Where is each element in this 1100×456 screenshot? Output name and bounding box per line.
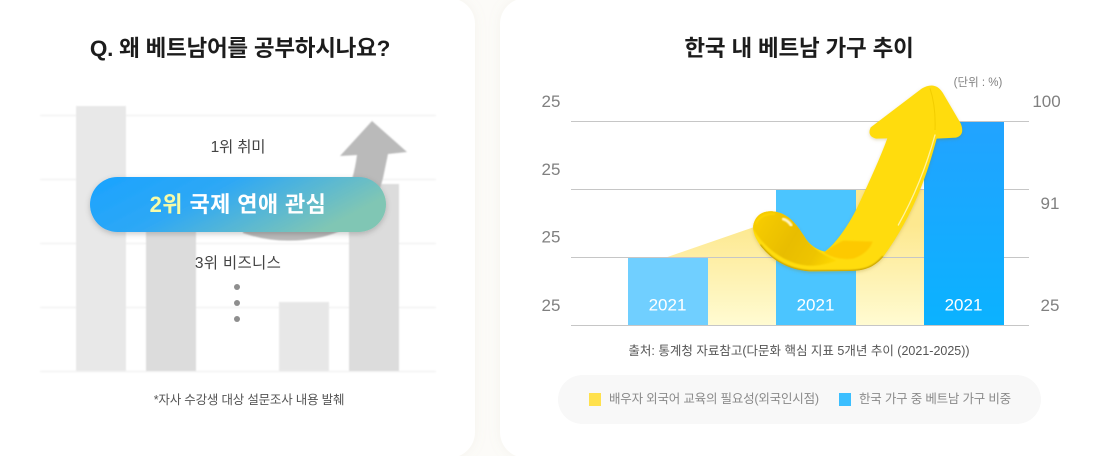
left axis labels: 25 bbox=[542, 228, 560, 246]
inner fold shade bbox=[824, 241, 873, 259]
icon: vertical ellipsis bbox=[234, 284, 240, 322]
left axis labels: 25 bbox=[542, 92, 560, 111]
footnote: *자사 수강생 대상 설문조사 내용 발췌 bbox=[154, 393, 344, 407]
right axis labels bbox=[1032, 92, 1061, 315]
right axis labels: 91 bbox=[1041, 194, 1059, 213]
bar 2021 dark bbox=[924, 122, 1004, 325]
source note: 출처: 통계청 자료참고(다문화 핵심 지표 5개년 추이 (2021-2025)) bbox=[628, 343, 970, 358]
legend item: yellow series: 배우자 외국어 교육의 필요성(외국인시점) bbox=[609, 392, 819, 406]
bar 2021 light bbox=[628, 258, 708, 325]
callout: second place pill: 2위 국제 연애 관심 bbox=[150, 192, 326, 217]
yellow area series bbox=[666, 225, 776, 325]
callout: second place pill bbox=[90, 177, 386, 232]
right axis labels: 25 bbox=[1041, 296, 1059, 315]
bar 2021 medium: 2021 bbox=[797, 296, 834, 314]
right axis labels: 100 bbox=[1032, 92, 1061, 111]
bar 2021 medium bbox=[776, 190, 856, 325]
panel: survey card bbox=[0, 0, 475, 456]
top rim light bbox=[762, 214, 774, 216]
panel: household trend card bbox=[542, 36, 1060, 406]
arrow edge highlight bbox=[898, 135, 935, 225]
ranking: first place: 1위 취미 bbox=[211, 138, 265, 156]
bar 2021 light: 2021 bbox=[649, 296, 686, 314]
title: survey question: Q. 왜 베트남어를 공부하시나요? bbox=[90, 36, 390, 61]
unit label: (단위 : %) bbox=[954, 76, 1002, 89]
legend item: blue series: 한국 가구 중 베트남 가구 비중 bbox=[859, 392, 1011, 406]
gloss spot bbox=[783, 219, 791, 225]
head crease bbox=[930, 88, 935, 130]
title: household trend: 한국 내 베트남 가구 추이 bbox=[684, 36, 914, 61]
bar 2021 dark: 2021 bbox=[945, 296, 982, 314]
lower dark rim bbox=[760, 245, 883, 271]
blob body shade bbox=[753, 211, 834, 266]
icon: blurred grey arrow bbox=[243, 121, 407, 241]
left axis labels bbox=[542, 92, 560, 315]
icon: yellow rising arrow bbox=[750, 85, 962, 271]
left axis labels: 25 bbox=[542, 296, 560, 315]
ranking: third place: 3위 비즈니스 bbox=[195, 254, 281, 272]
legend bbox=[558, 375, 1041, 424]
left axis labels: 25 bbox=[542, 160, 560, 179]
bar and area chart bbox=[571, 122, 1029, 326]
blurred background chart bbox=[40, 106, 436, 372]
